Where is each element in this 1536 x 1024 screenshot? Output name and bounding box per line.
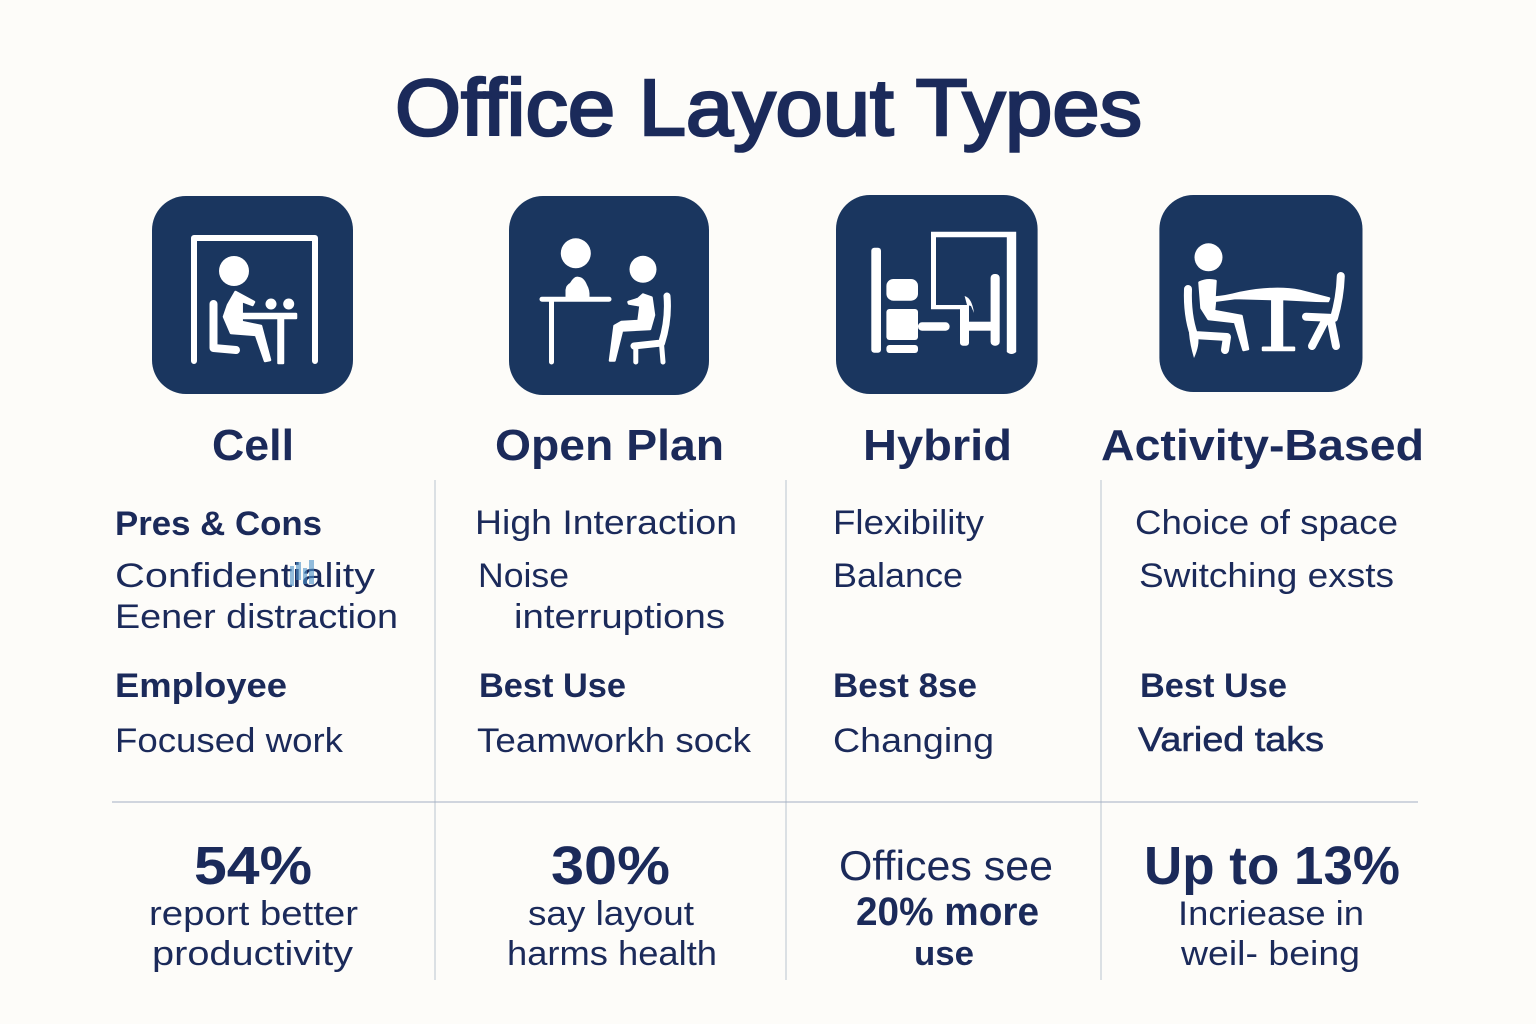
pros and cons: cell: Pres & Cons xyxy=(115,505,322,543)
panel: activity-based xyxy=(1101,195,1424,973)
statistic: open plan: 30% xyxy=(551,836,670,896)
statistic: activity-based: Incriease in xyxy=(1178,895,1364,933)
statistic: open plan xyxy=(507,836,717,973)
statistic: hybrid: 20% more xyxy=(856,890,1039,934)
statistic: open plan: harms health xyxy=(507,935,717,973)
pros and cons: cell: Eener distraction xyxy=(115,598,398,636)
pros and cons: cell xyxy=(115,505,398,636)
pros and cons: open plan: Noise xyxy=(478,557,569,595)
icon: two people at open table xyxy=(509,196,709,395)
panel: hybrid xyxy=(833,195,1053,973)
heading: activity-based: Activity-Based xyxy=(1101,421,1424,470)
best use: open plan xyxy=(477,667,752,760)
statistic: activity-based xyxy=(1144,836,1400,973)
pros and cons: activity-based: Switching exsts xyxy=(1139,557,1394,595)
title: Office Layout Types xyxy=(395,63,1142,152)
pros and cons: activity-based: Choice of space xyxy=(1135,504,1398,542)
pros and cons: open plan: High Interaction xyxy=(475,504,737,542)
panel: cell xyxy=(115,196,398,973)
best use: hybrid: Best 8se xyxy=(833,667,977,705)
icon: people at shared table xyxy=(1159,195,1362,392)
pros and cons: hybrid: Balance xyxy=(833,557,963,595)
pros and cons: cell: Confidentiality xyxy=(115,557,375,595)
statistic: hybrid: use xyxy=(914,935,974,973)
statistic: cell: productivity xyxy=(152,935,353,973)
best use: cell: Focused work xyxy=(115,722,344,760)
statistic: cell xyxy=(149,836,358,973)
pros and cons: hybrid: Flexibility xyxy=(833,504,984,542)
best use: open plan: Best Use xyxy=(479,667,626,705)
best use: activity-based: Varied taks xyxy=(1138,721,1324,759)
icon: hybrid workstation xyxy=(836,195,1038,394)
heading: hybrid: Hybrid xyxy=(863,421,1012,470)
heading: open plan: Open Plan xyxy=(495,421,724,470)
statistic: hybrid: Offices see xyxy=(839,842,1053,889)
best use: hybrid xyxy=(833,667,994,760)
icon: person at desk in cell xyxy=(152,196,353,394)
statistic: hybrid xyxy=(839,842,1053,973)
best use: cell xyxy=(115,667,344,760)
panel: open plan xyxy=(475,196,752,973)
heading: cell: Cell xyxy=(212,421,294,470)
best use: hybrid: Changing xyxy=(833,722,994,760)
statistic: activity-based: Up to 13% xyxy=(1144,836,1400,896)
statistic: cell: 54% xyxy=(194,836,312,896)
pros and cons: open plan: interruptions xyxy=(514,598,725,636)
statistic: activity-based: weil- being xyxy=(1180,935,1360,973)
best use: cell: Employee xyxy=(115,667,287,705)
statistic: cell: report better xyxy=(149,895,358,933)
statistic: open plan: say layout xyxy=(528,895,695,933)
pros and cons: hybrid xyxy=(833,504,984,595)
best use: open plan: Teamworkh sock xyxy=(477,722,752,760)
pros and cons: open plan xyxy=(475,504,737,636)
best use: activity-based xyxy=(1138,667,1324,759)
best use: activity-based: Best Use xyxy=(1140,667,1287,705)
pros and cons: activity-based xyxy=(1135,504,1398,595)
